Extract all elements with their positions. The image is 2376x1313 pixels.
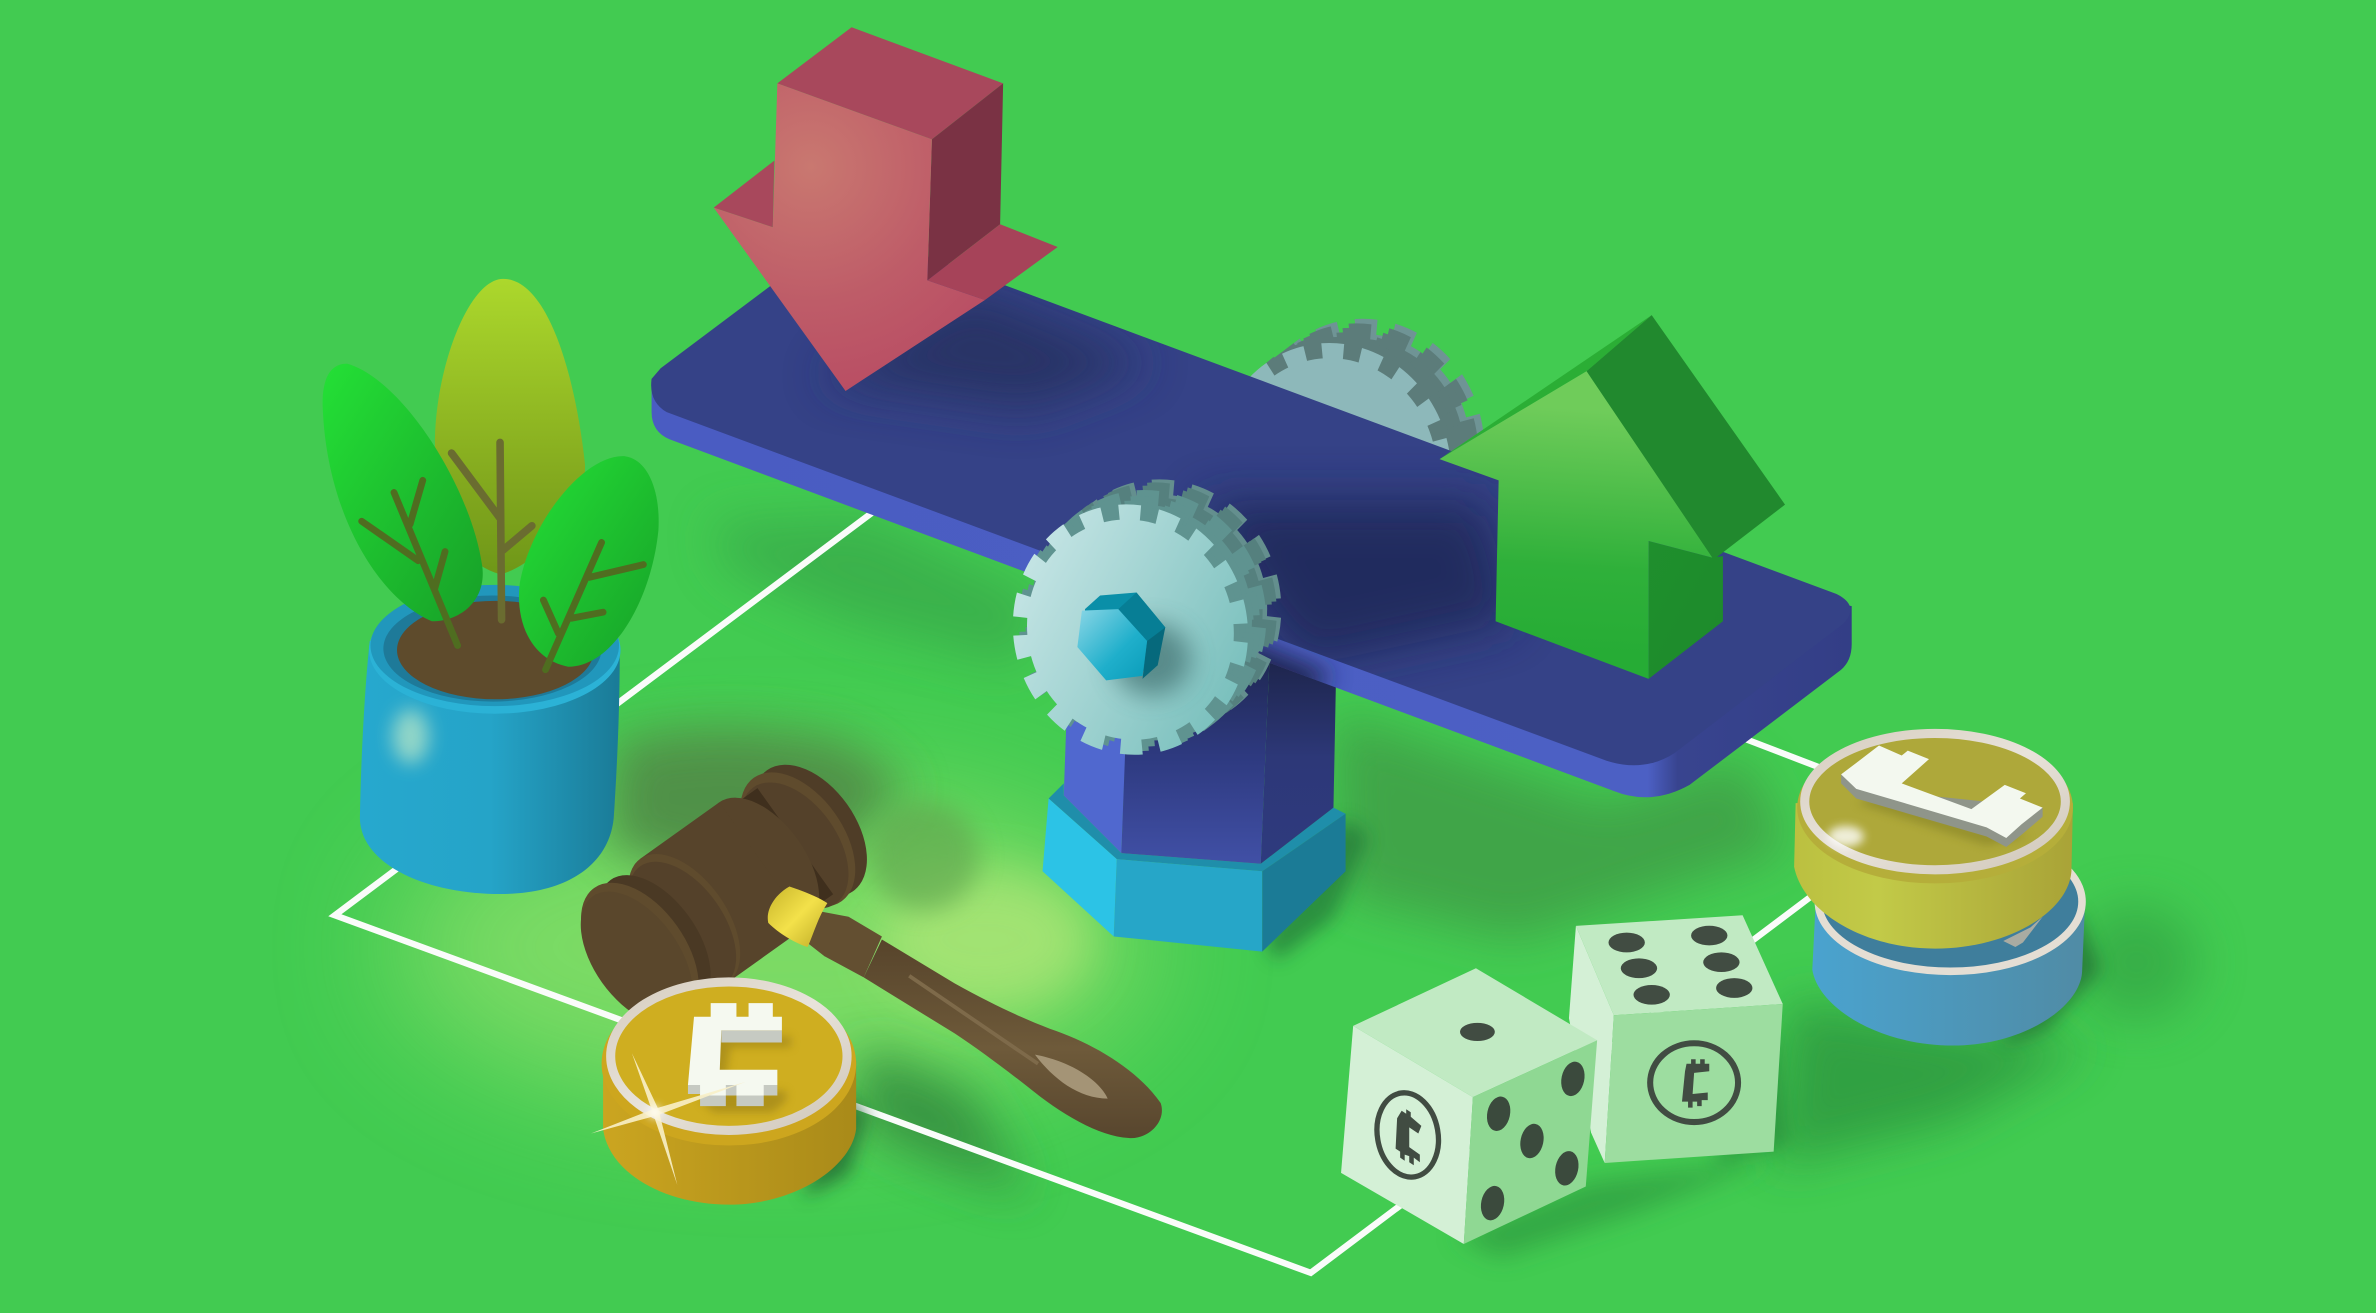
blue coin <box>1812 832 2085 1046</box>
hex bolt <box>1077 592 1165 680</box>
centre leaf <box>435 279 585 620</box>
front gear <box>995 464 1299 770</box>
gavel head <box>555 740 893 1044</box>
coin symbol <box>688 1003 791 1112</box>
gavel <box>555 740 1162 1138</box>
coin symbol <box>1841 746 2043 847</box>
right leaf <box>519 456 659 670</box>
ground glow and shadows <box>394 515 2197 1258</box>
pedestal <box>1043 652 1346 952</box>
brass ferrule <box>768 886 827 947</box>
rear die <box>1569 915 1783 1163</box>
front die <box>1341 968 1597 1244</box>
green up arrow <box>1440 315 1785 679</box>
red down arrow <box>714 27 1058 391</box>
pot <box>360 585 621 894</box>
sparkle <box>591 1053 746 1185</box>
die coin icon <box>1650 1043 1738 1122</box>
die coin icon <box>1371 1088 1445 1182</box>
gold coin <box>591 982 856 1205</box>
contact shadows <box>803 909 2100 1197</box>
floor outline <box>335 485 1834 1273</box>
left leaf <box>323 364 483 646</box>
olive coin <box>1794 732 2073 949</box>
plant pot with leaves <box>323 279 659 894</box>
seesaw plank <box>651 227 1852 797</box>
gavel collar <box>803 911 882 977</box>
plank shadows <box>818 288 1515 667</box>
illustration <box>322 27 2206 1276</box>
back gear <box>1198 303 1502 609</box>
gavel handle <box>864 939 1162 1138</box>
